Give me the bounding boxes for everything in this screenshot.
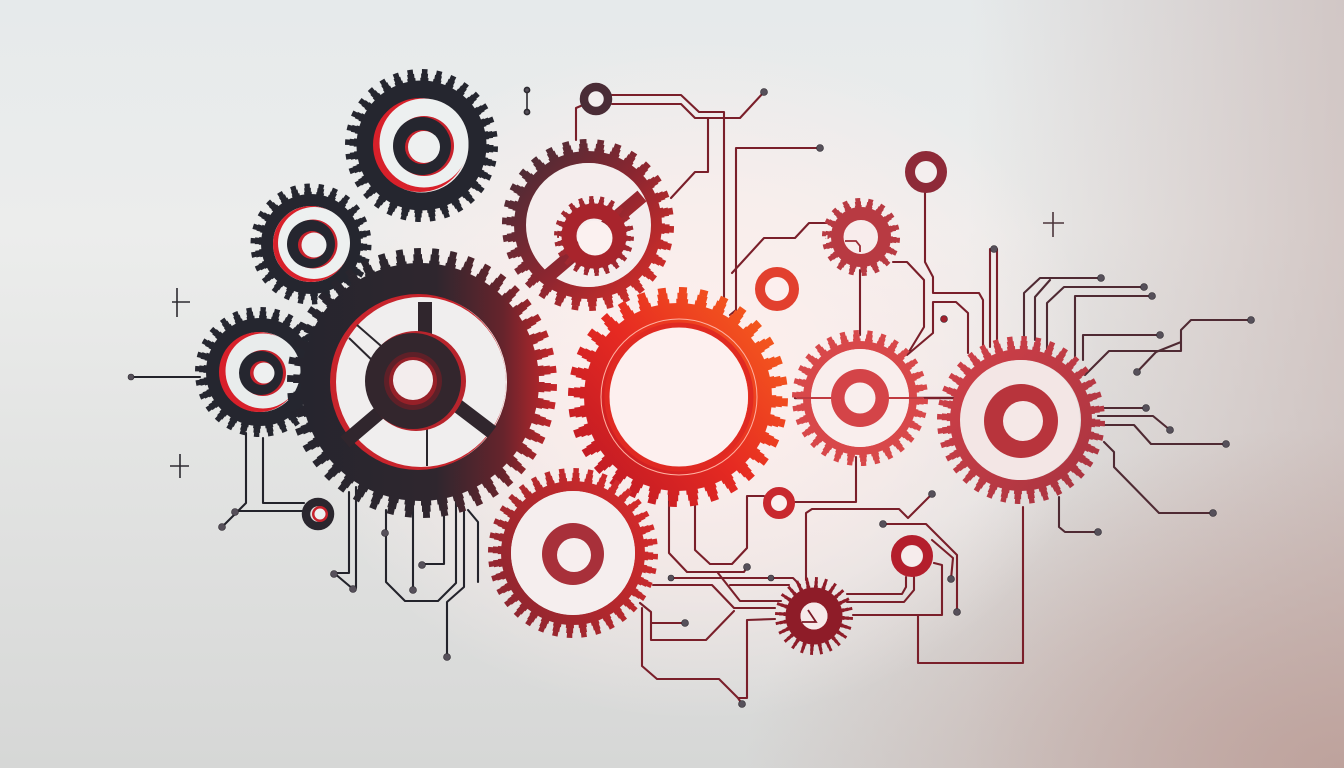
gear: small upper right <box>824 200 898 274</box>
ring: lower right <box>896 540 928 572</box>
wire: zigzag <box>1085 320 1251 375</box>
wire: left lead <box>131 376 200 378</box>
ring: lower center <box>767 491 791 515</box>
spokes <box>345 302 492 442</box>
wire: top traces <box>576 92 764 300</box>
gear: red lower <box>490 470 656 636</box>
wire: fan lower <box>1059 408 1226 532</box>
ring: lower left <box>306 502 330 526</box>
wire: double lines <box>990 249 997 347</box>
pin <box>526 90 528 112</box>
wire: bottom loop <box>847 507 1023 663</box>
wire: lower center <box>669 457 856 572</box>
inner trace <box>802 610 816 622</box>
thin lines <box>349 325 427 466</box>
wire: left bundle <box>640 573 800 704</box>
wire: upper branch <box>730 148 820 315</box>
cross line <box>797 397 923 399</box>
gear: dark top <box>348 72 496 220</box>
circuit wires: far right <box>1024 278 1251 532</box>
wire: gear to gear <box>893 262 968 355</box>
ring: top dark <box>584 87 608 111</box>
circuit wires: center and right <box>576 92 1023 704</box>
ring: upper right <box>910 156 942 188</box>
circuit wires: left <box>131 377 478 657</box>
wire: middle drop <box>413 500 444 590</box>
connector dots <box>128 88 1254 708</box>
wire: long drop <box>447 507 478 657</box>
plus: left upper <box>172 288 190 317</box>
wire: fan upper <box>1024 278 1160 360</box>
gear: small lower dark red <box>777 579 851 653</box>
wire: ring link <box>925 193 983 345</box>
wire: ring bottom-left traces <box>222 433 304 527</box>
gear: dark lower <box>197 309 323 435</box>
gear: dark middle <box>253 186 369 302</box>
ring: orange <box>760 272 794 306</box>
inner small gear <box>562 204 626 268</box>
wire: small gear link <box>732 223 860 335</box>
inner trace <box>845 241 860 252</box>
wire: octagon loop <box>386 497 456 601</box>
icon: plus marks and small pin <box>170 87 1064 478</box>
gear: red upper <box>504 141 672 309</box>
gear: large dark <box>290 251 554 515</box>
plus: right <box>1043 212 1064 237</box>
wire: box <box>806 494 957 612</box>
wire: horizontal through gears <box>795 397 960 399</box>
plus: left lower <box>170 454 189 478</box>
gear: coral right-center <box>794 332 926 464</box>
rod <box>548 196 642 276</box>
wire: lower bundle <box>334 487 356 589</box>
gear: crimson right <box>940 338 1102 502</box>
gear: orange center <box>571 290 785 504</box>
